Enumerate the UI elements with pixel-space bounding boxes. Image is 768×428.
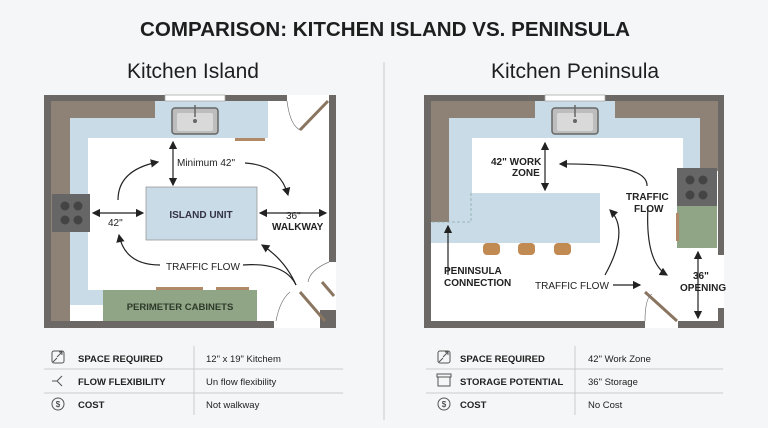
walls xyxy=(424,95,724,328)
panel: peninsula floor plan: ZONE xyxy=(512,168,540,179)
panel: peninsula floor plan xyxy=(424,95,726,328)
icon: stove xyxy=(677,168,717,206)
panel: island floor plan: 36" xyxy=(286,211,301,222)
dimension arrows xyxy=(93,142,326,285)
perimeter cabinets xyxy=(103,287,257,321)
panel: peninsula floor plan: 36" xyxy=(693,271,709,282)
table: peninsula: No Cost xyxy=(588,400,623,411)
icon: flow xyxy=(52,376,62,386)
table: island: Un flow flexibility xyxy=(206,377,276,388)
island unit xyxy=(146,187,257,240)
table: island: COST xyxy=(78,400,105,411)
table: island: Not walkway xyxy=(206,400,260,411)
icon: expand xyxy=(52,351,64,363)
panel: peninsula floor plan: PENINSULA xyxy=(444,266,502,277)
icon: expand xyxy=(438,351,450,363)
icon: cost xyxy=(52,398,64,410)
table: peninsula: 42" Work Zone xyxy=(588,354,651,365)
panel: peninsula floor plan: CONNECTION xyxy=(444,278,511,289)
panel: island floor plan: TRAFFIC FLOW xyxy=(166,262,240,273)
icon: sink xyxy=(552,105,598,134)
panel: island floor plan: Minimum 42" xyxy=(177,158,235,169)
panel: island floor plan xyxy=(44,95,336,328)
table: peninsula: COST xyxy=(460,400,487,411)
table: peninsula: SPACE REQUIRED xyxy=(460,354,545,365)
icon: cost: $ xyxy=(56,400,61,409)
island unit: ISLAND UNIT xyxy=(169,210,233,221)
table: island: SPACE REQUIRED xyxy=(78,354,163,365)
panel: peninsula floor plan: 42" WORK xyxy=(491,157,542,168)
doors xyxy=(300,101,334,321)
title: COMPARISON: KITCHEN ISLAND VS. PENINSULA xyxy=(140,18,630,41)
table: island: FLOW FLEXIBILITY xyxy=(78,377,166,388)
perimeter cabinets: PERIMETER CABINETS xyxy=(127,302,233,313)
icon: storage box xyxy=(437,374,451,386)
table: island: 12" x 19" Kitchem xyxy=(206,354,281,365)
table: peninsula xyxy=(426,346,723,415)
walls xyxy=(44,95,336,328)
peninsula counter xyxy=(431,193,600,243)
table: island xyxy=(44,346,343,415)
arrows xyxy=(448,143,698,318)
heading: kitchen peninsula: Kitchen Peninsula xyxy=(491,60,659,83)
panel: peninsula floor plan: TRAFFIC FLOW xyxy=(535,281,609,292)
icon: cost: $ xyxy=(442,400,447,409)
panel: island floor plan: WALKWAY xyxy=(272,222,324,233)
stools xyxy=(483,243,571,255)
icon: cost xyxy=(438,398,450,410)
panel: peninsula floor plan: OPENING xyxy=(680,283,726,294)
panel: island floor plan: 42" xyxy=(108,218,123,229)
icon: sink xyxy=(172,105,218,134)
table: peninsula: STORAGE POTENTIAL xyxy=(460,377,563,388)
icon: stove xyxy=(52,194,90,232)
table: peninsula: 36" Storage xyxy=(588,377,638,388)
heading: kitchen island: Kitchen Island xyxy=(127,60,259,83)
panel: peninsula floor plan: FLOW xyxy=(634,204,664,215)
panel: peninsula floor plan: TRAFFIC xyxy=(626,192,669,203)
